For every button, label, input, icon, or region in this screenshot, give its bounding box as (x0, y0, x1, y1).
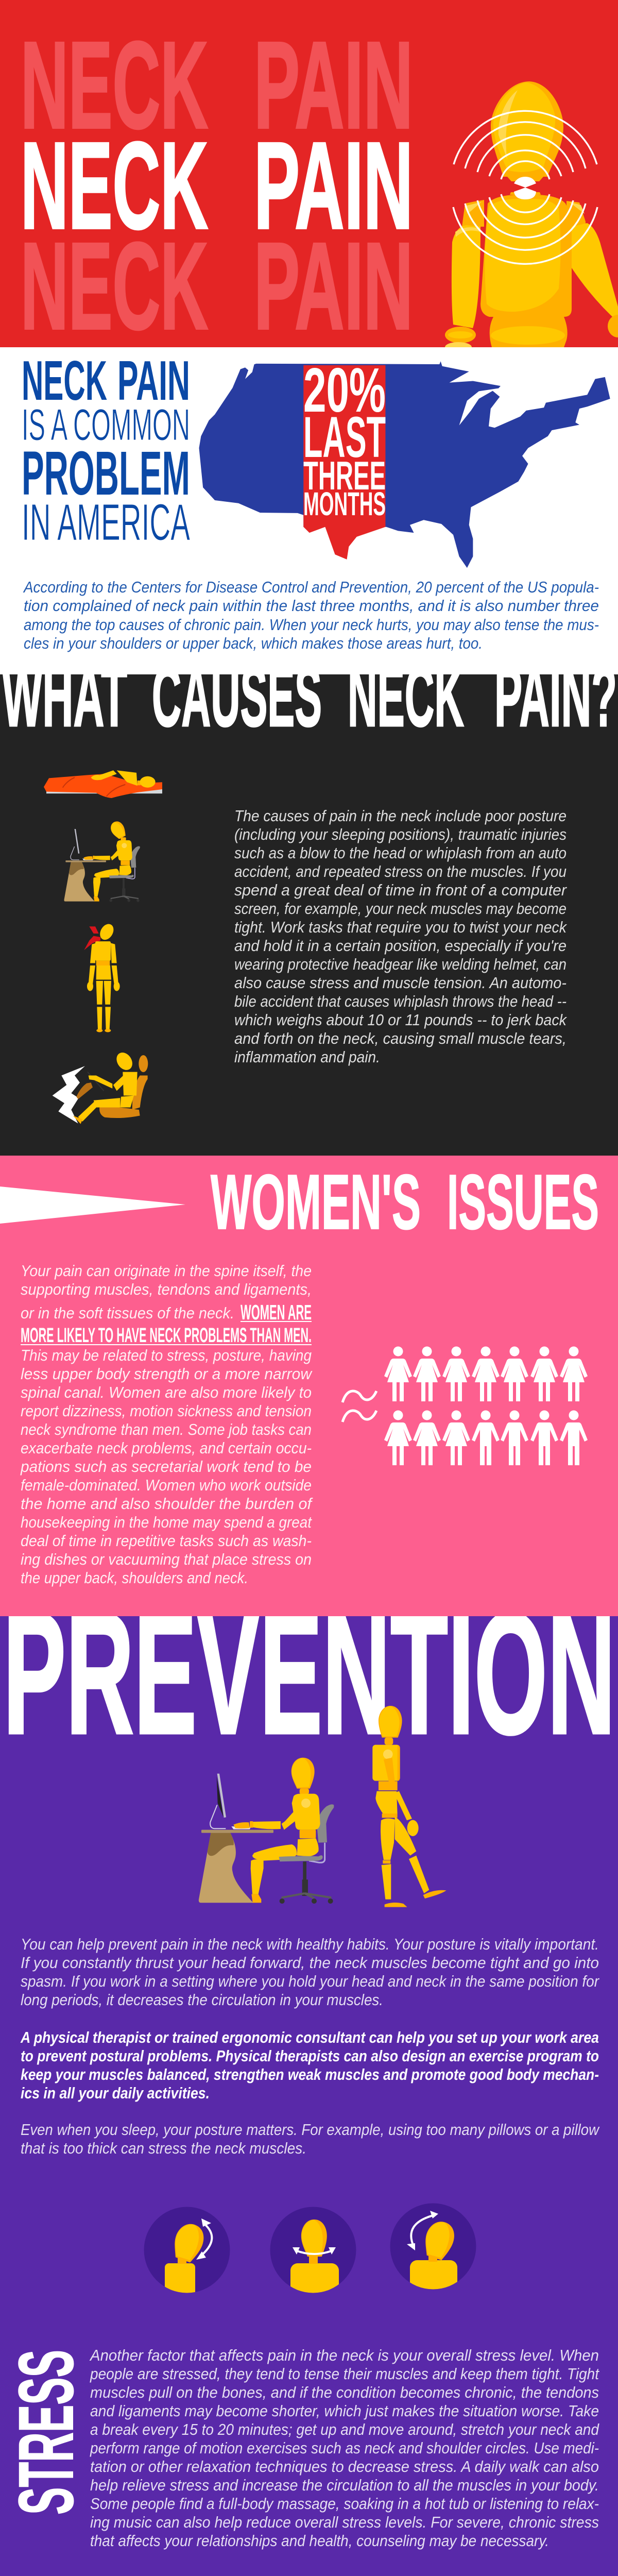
illustration: mannequin from behind with pain rings (445, 81, 618, 352)
text block: stress paragraph: that affects your relationships and health, counseling may be necessary. (90, 2532, 549, 2550)
text block: intro paragraph: tion complained of neck pain within the last three months, and it is also number three (24, 597, 599, 615)
illustration: walking mannequin (372, 1706, 447, 1907)
text block: causes paragraph: accident, and repeated stress on the muscles. If you (234, 862, 566, 880)
text block: causes paragraph: tight. Work tasks that require you to twist your neck (234, 918, 567, 936)
text block: women's issues paragraph: the upper back, shoulders and neck. (21, 1569, 248, 1587)
text block: women's issues paragraph: less upper body strength or a more narrow (21, 1365, 313, 1383)
text block: women's issues paragraph: ing dishes or vacuuming that place stress on (21, 1550, 312, 1568)
icon: approximately equal sign (342, 1391, 376, 1422)
illustration: sleeping mannequin under blanket (44, 770, 162, 798)
icon: white pointer triangle (0, 1187, 185, 1224)
heading: neck pain is a common problem in America: NECK (22, 349, 107, 412)
text block: women's issues paragraph: This may be related to stress, posture, having (21, 1346, 312, 1364)
heading: neck pain is a common problem in America (22, 349, 190, 551)
panel: prevention (0, 1616, 618, 2576)
text block: women's issues paragraph: female-dominated. Women who work outside (21, 1476, 312, 1494)
text block: intro paragraph (23, 578, 599, 652)
text block: women's issues paragraph: housekeeping in the home may spend a great (21, 1513, 312, 1531)
panel: neck pain is a common problem (22, 349, 610, 652)
text block: stress paragraph: Another factor that affects pain in the neck is your overall stress level. When (89, 2346, 599, 2364)
text block: women's issues paragraph: spinal canal. Women are also more likely to (21, 1383, 312, 1401)
heading: neck pain is a common problem in America: PAIN (117, 349, 190, 412)
chart: approximately 10 women to 4 men pictogram (342, 1347, 588, 1465)
text block: causes paragraph: wearing protective headgear like welding helmet, can (234, 955, 566, 973)
illustration: mannequin in car seat with crash burst (53, 1049, 148, 1124)
panel: women's issues (0, 1156, 618, 1616)
text block: women's issues paragraph: exacerbate neck problems, and certain occu- (21, 1439, 312, 1457)
text block: causes paragraph: screen, for example, your neck muscles may become (234, 900, 566, 918)
panel: header (0, 0, 618, 347)
text block: women's issues paragraph: Your pain can originate in the spine itself, the (21, 1262, 312, 1280)
heading: women's issues: WOMEN'S (211, 1158, 421, 1245)
text block: prevention paragraph: long periods, it decreases the circulation in your muscles. (21, 1991, 383, 2009)
text block: women's issues paragraph: supporting muscles, tendons and ligaments, (21, 1280, 312, 1298)
text block: causes paragraph: which weighs about 10 or 11 pounds -- to jerk back (234, 1011, 567, 1029)
text block: women's issues paragraph: report dizziness, motion sickness and tension (21, 1402, 312, 1420)
label: 20% last three months: MONTHS (303, 485, 386, 522)
callout: women are more likely: WOMEN ARE (241, 1300, 312, 1324)
text block: women's issues paragraph: neck syndrome than men. Some job tasks can (21, 1420, 312, 1438)
label: 20% last three months (303, 355, 386, 522)
illustration: standing mannequin with red neck pain mark (84, 921, 120, 1032)
panel: what causes neck pain (0, 665, 618, 1156)
illustration: mannequin seated at computer (199, 1758, 334, 1904)
heading: neck pain is a common problem in America: IS A COMMON (22, 400, 190, 450)
label: 20% last three months: LAST (303, 405, 386, 469)
heading: neck pain is a common problem in America: PROBLEM (22, 438, 190, 508)
text block: prevention paragraph (21, 1935, 600, 2009)
callout: women are more likely: MORE LIKELY TO HAVE NECK PROBLEMS THAN MEN. (21, 1324, 312, 1347)
text block: causes paragraph: spend a great deal of time in front of a computer (234, 881, 568, 899)
text block: causes paragraph (234, 807, 568, 1066)
heading: faded top NECK PAIN: PAIN (254, 16, 413, 154)
text block: physical therapist bold paragraph (20, 2028, 599, 2102)
text block: intro paragraph: cles in your shoulders or upper back, which makes those areas hurt, too. (24, 634, 483, 652)
illustration: neck tilt exercise (144, 2207, 230, 2299)
text block: causes paragraph: such as a blow to the head or whiplash from an auto (234, 844, 566, 862)
text block: causes paragraph: (including your sleeping positions), traumatic injuries (234, 825, 566, 843)
text block: women's issues paragraph: the home and also shoulder the burden of (21, 1495, 313, 1513)
callout: women are more likely (21, 1300, 312, 1347)
text block: sleep posture: that is too thick can stress the neck muscles. (21, 2139, 306, 2157)
heading: neck pain is a common problem in America: IN AMERICA (22, 494, 190, 551)
illustration: neck rotation exercise (270, 2207, 356, 2299)
text block: physical therapist bold paragraph: ics in all your daily activities. (21, 2084, 210, 2102)
title: NECK PAIN: PAIN (254, 116, 413, 255)
heading: faded top NECK PAIN: NECK (21, 16, 208, 154)
text block: causes paragraph: and forth on the neck, causing small muscle tears, (234, 1029, 566, 1047)
text block: causes paragraph: The causes of pain in the neck include poor posture (234, 807, 566, 825)
icon: neck joint highlight (514, 177, 536, 199)
label: 20% last three months: 20% (303, 355, 386, 425)
heading: stress: STRESS (3, 2350, 89, 2515)
label: 20% last three months: THREE (303, 453, 386, 498)
text block: stress paragraph (89, 2346, 600, 2550)
heading: what causes neck pain (2, 649, 617, 744)
map: United States with 20% column (199, 355, 610, 568)
text block: women's issues paragraph (20, 1262, 313, 1587)
text block: women's issues paragraph: or in the soft tissues of the neck. (21, 1304, 234, 1322)
text block: causes paragraph: and hold it in a certain position, especially if you're (234, 937, 566, 955)
text block: causes paragraph: also cause stress and muscle tension. An automo- (234, 974, 566, 992)
icon: pain rings (453, 111, 597, 264)
text block: causes paragraph: inflammation and pain. (234, 1048, 380, 1066)
text block: women's issues paragraph: pations such as secretarial work tend to be (20, 1458, 312, 1476)
text block: causes paragraph: bile accident that causes whiplash throws the head -- (234, 992, 566, 1010)
illustration: neck extension exercise (390, 2203, 476, 2296)
title: NECK PAIN: NECK (21, 116, 208, 255)
text block: prevention paragraph: If you constantly thrust your head forward, the neck muscles become tight and go into (21, 1954, 599, 1972)
illustration: mannequin at desk with head forward (64, 819, 140, 902)
text block: sleep posture (21, 2121, 600, 2157)
text block: women's issues paragraph: deal of time in repetitive tasks such as wash- (21, 1532, 312, 1550)
